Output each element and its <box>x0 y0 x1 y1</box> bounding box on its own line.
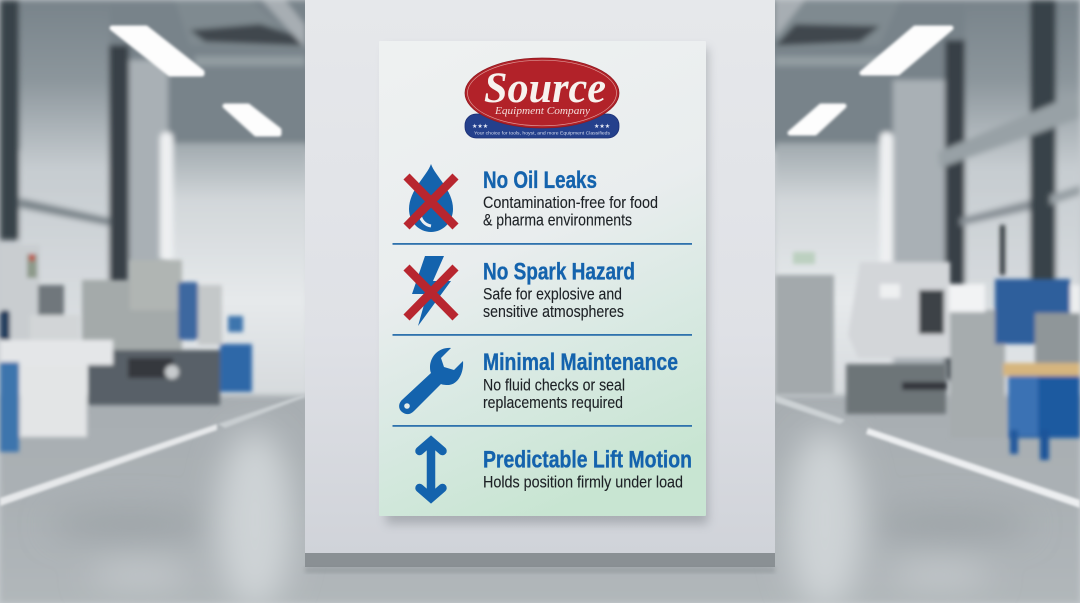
item: no spark hazard <box>406 256 635 326</box>
logo: Source Equipment Company: Equipment Company <box>494 106 591 117</box>
description: Contamination-free for food <box>483 193 658 212</box>
logo: Source Equipment Company: ★★★ <box>472 123 488 130</box>
description: & pharma environments <box>483 210 632 230</box>
back walls <box>168 143 308 405</box>
heading: Predictable Lift Motion <box>483 447 692 474</box>
description: No fluid checks or seal <box>483 376 625 395</box>
description <box>483 376 625 412</box>
sign panel <box>379 41 706 516</box>
floor <box>0 395 1080 603</box>
heading: No Oil Leaks <box>483 167 597 194</box>
description: sensitive atmospheres <box>483 302 624 321</box>
heading: No Spark Hazard <box>483 258 635 285</box>
right machines <box>775 225 1080 460</box>
item: minimal maintenance <box>399 348 678 414</box>
feature wall <box>305 0 775 573</box>
ceiling <box>0 0 1080 150</box>
icon: crossed-out lightning bolt <box>406 256 456 326</box>
icon: up-down arrow <box>420 441 442 498</box>
ceiling lights <box>112 28 951 134</box>
logo: Source Equipment Company <box>465 58 619 138</box>
logo: Source Equipment Company: Source <box>484 65 606 112</box>
description: Holds position firmly under load <box>483 472 683 491</box>
sign shadow <box>386 48 708 524</box>
floor markings <box>0 394 1080 508</box>
icon: wrench <box>399 348 463 414</box>
left side wall panels <box>20 0 110 400</box>
description <box>483 193 658 230</box>
description <box>483 285 624 321</box>
logo: Source Equipment Company: Your choice for tools, hoyst, and more Equipment Classifieds <box>474 130 611 136</box>
icon: crossed-out oil drop <box>406 164 456 232</box>
description: replacements required <box>483 393 623 412</box>
logo: Source Equipment Company: ★★★ <box>594 123 610 130</box>
item: no oil leaks <box>406 164 658 232</box>
description: Safe for explosive and <box>483 285 622 304</box>
heading: Minimal Maintenance <box>483 349 678 376</box>
item: predictable lift motion <box>420 441 692 498</box>
floor reflections <box>50 430 1030 603</box>
right side wall panels <box>965 0 1080 400</box>
left machines <box>0 245 252 452</box>
